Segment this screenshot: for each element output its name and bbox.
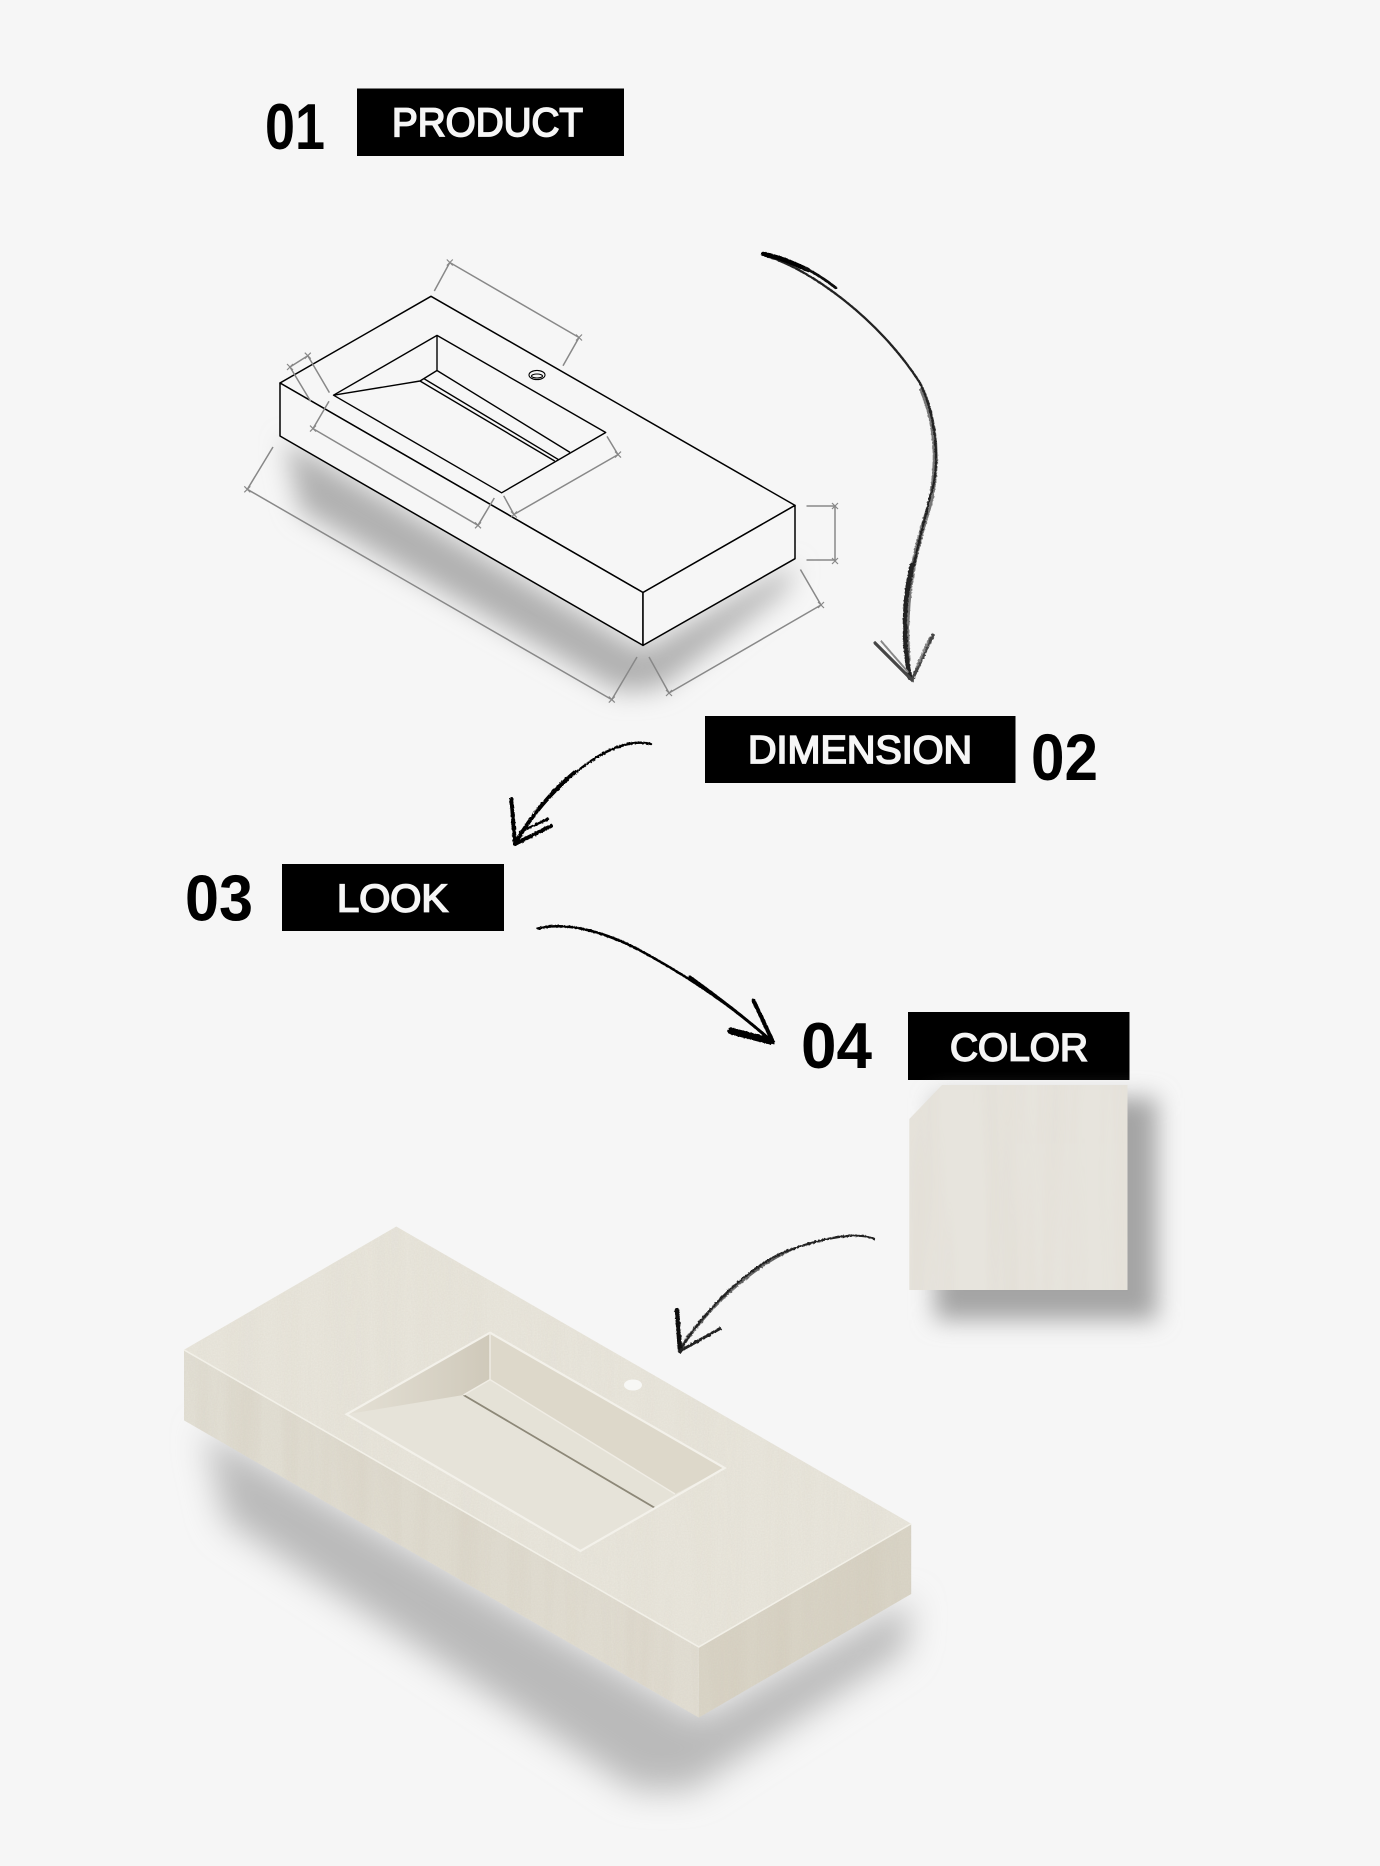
label box: look: LOOK (337, 878, 448, 920)
dimension lines (244, 260, 838, 703)
sink shadow (205, 1430, 910, 1790)
sink body outline (280, 296, 795, 645)
tap hole (624, 1380, 642, 1390)
line drawing: sink with dimensions (244, 260, 838, 703)
label box: product: PRODUCT (392, 101, 583, 145)
back wall (490, 1333, 725, 1494)
number 03: 03 (185, 862, 253, 934)
arrow: look to color (538, 926, 773, 1042)
arrow: product to dimension (763, 254, 936, 680)
label box: look (282, 864, 504, 931)
number 01: 01 (265, 90, 325, 163)
basin rim highlight (347, 1333, 725, 1551)
right side face (699, 1524, 911, 1718)
number 04: 04 (801, 1009, 872, 1082)
top face (184, 1226, 911, 1647)
swatch texture (905, 1080, 1130, 1292)
rendered sink (180, 1225, 915, 1790)
left slanted wall (347, 1333, 490, 1414)
swatch shadow (935, 1098, 1157, 1320)
arrow: color to finished sink (677, 1236, 874, 1351)
color swatch (905, 1080, 1157, 1320)
step 02 dimension label (705, 716, 1098, 794)
right floor strip (464, 1380, 675, 1508)
label box: dimension (705, 716, 1016, 783)
top texture (180, 1225, 915, 1650)
label box: color: COLOR (950, 1026, 1088, 1070)
drop shadow of line drawing (285, 440, 795, 692)
step 04 color label (801, 1009, 1130, 1082)
step 01 product label (265, 88, 624, 163)
step 03 look label (185, 862, 504, 934)
left side face (184, 1350, 699, 1718)
number 02: 02 (1031, 720, 1098, 794)
swatch tile (909, 1085, 1128, 1290)
basin floor (347, 1395, 655, 1551)
label box: product (357, 88, 624, 156)
side texture (204, 1380, 666, 1697)
basin (347, 1333, 725, 1551)
top face edge highlight (184, 1350, 911, 1647)
arrow: dimension to look (512, 743, 651, 844)
basin outline (334, 335, 606, 493)
label box: color (908, 1012, 1130, 1080)
tap hole (529, 370, 545, 380)
label box: dimension: DIMENSION (748, 729, 972, 772)
drain slot (464, 1395, 655, 1508)
